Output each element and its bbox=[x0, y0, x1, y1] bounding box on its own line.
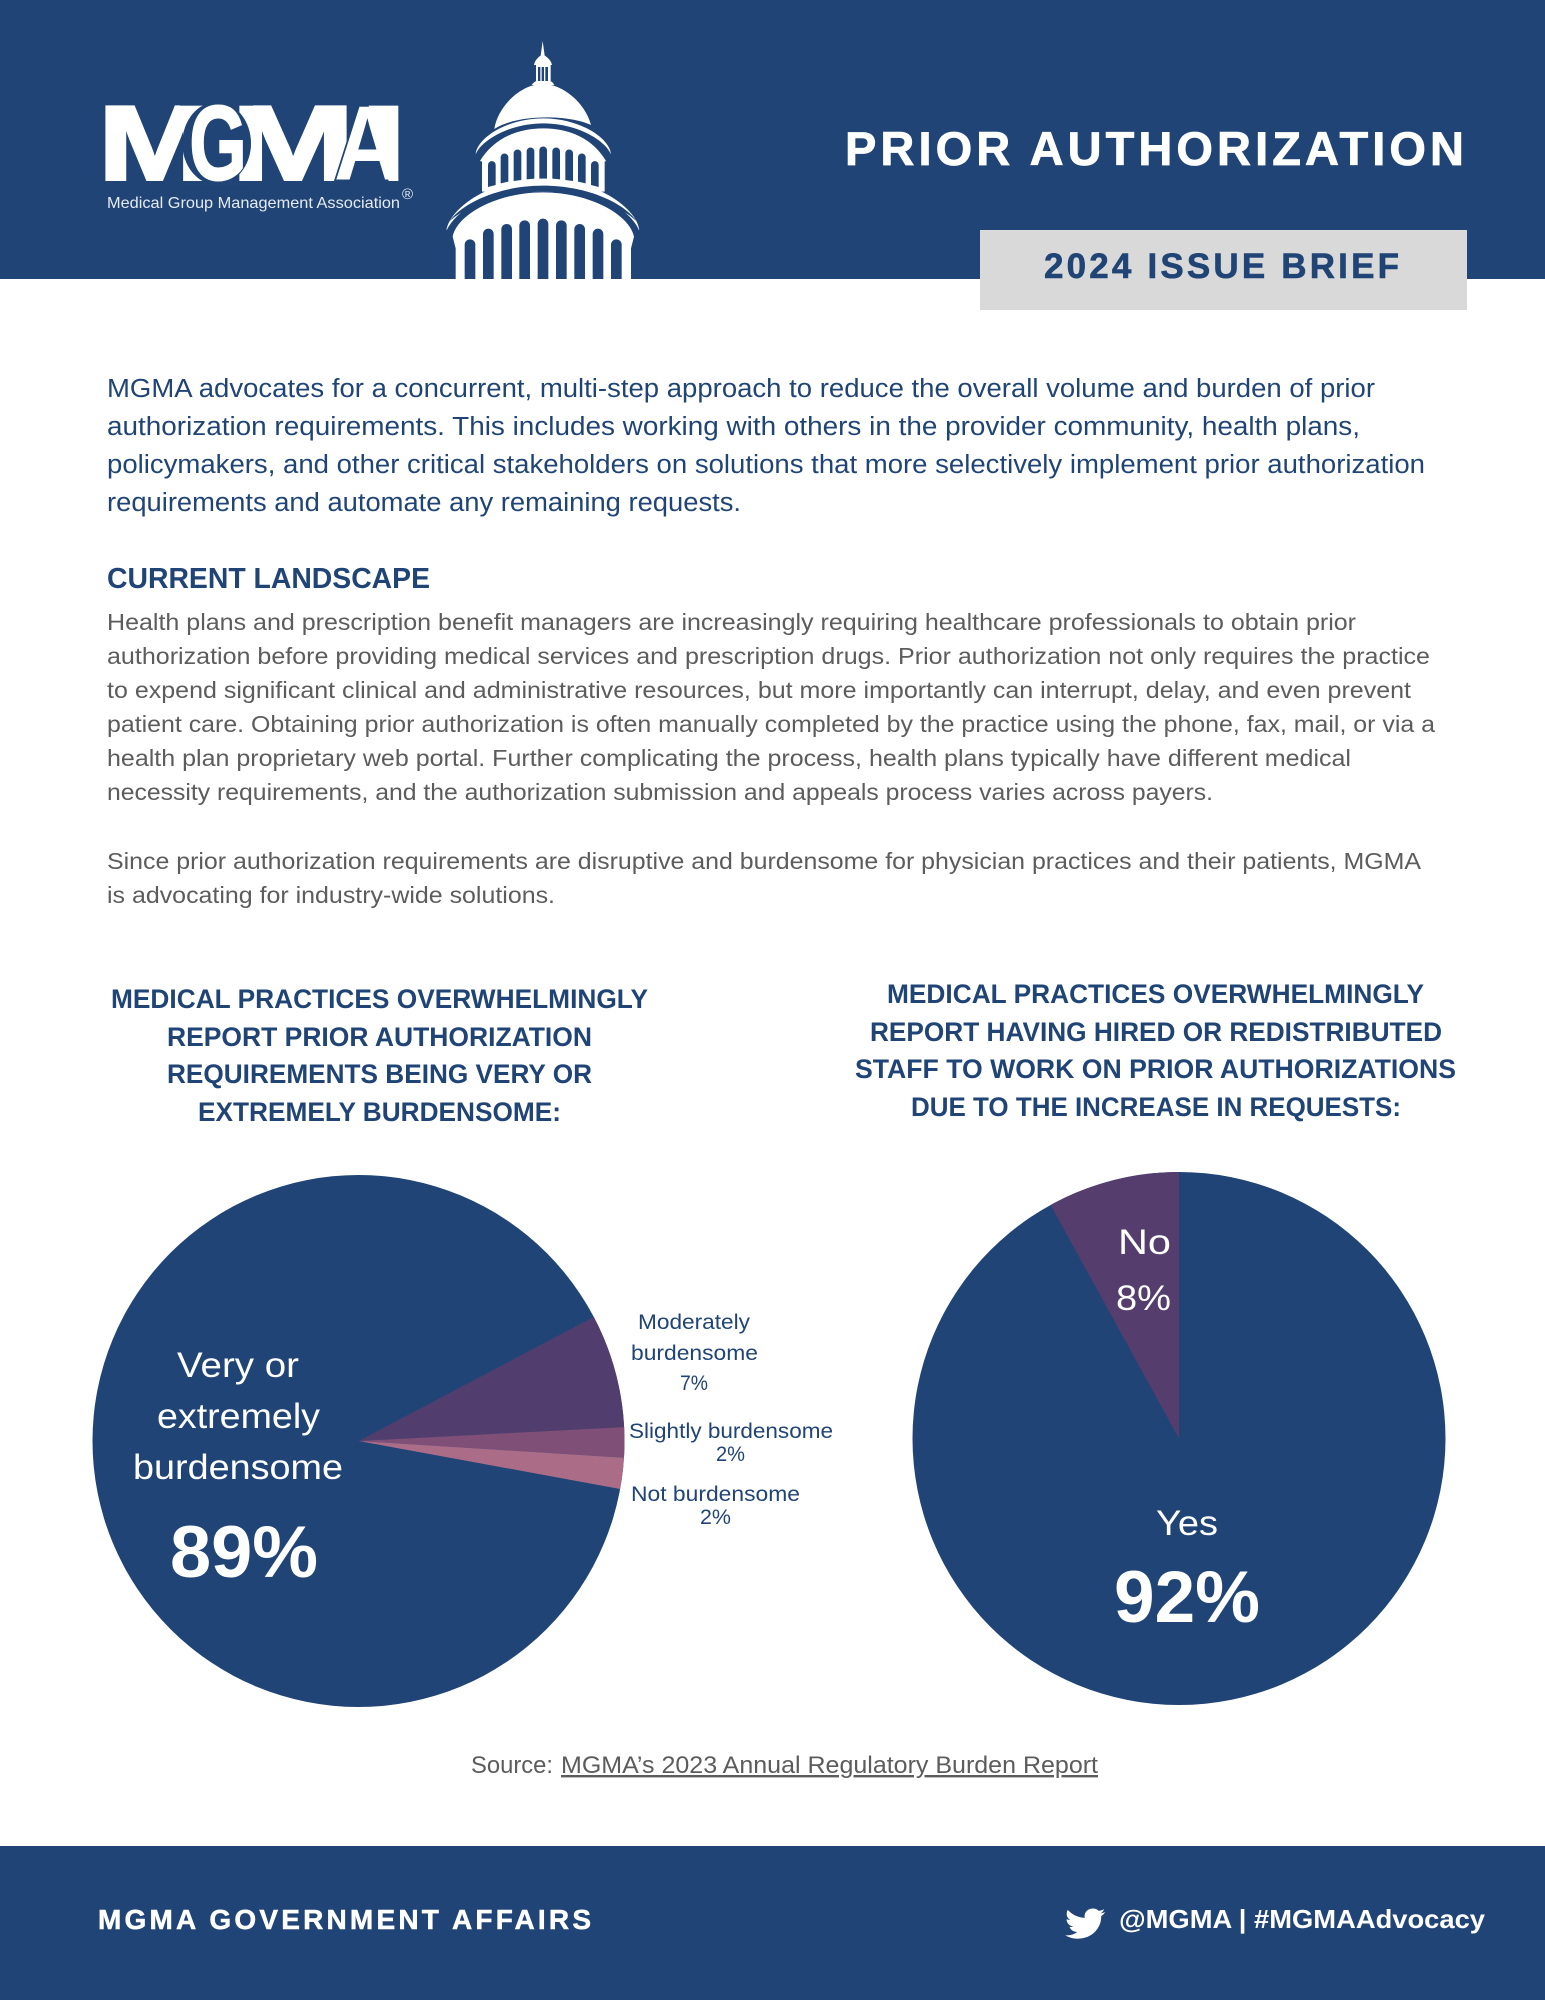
pie chart: hired or redistributed staff bbox=[912, 1172, 1446, 1705]
source line: MGMA’s 2023 Annual Regulatory Burden Report bbox=[561, 1752, 1098, 1779]
panel: header band bbox=[0, 0, 1545, 279]
label: not burdensome bbox=[631, 1482, 800, 1529]
label: slightly burdensome bbox=[629, 1419, 833, 1466]
text block: current landscape body: necessity requirements, and the authorization submission and appeals process varies across payers. bbox=[107, 779, 1213, 805]
pie chart: burden level bbox=[92, 1175, 624, 1707]
icon: capitol dome bbox=[447, 41, 639, 279]
heading: right chart bbox=[855, 979, 1456, 1122]
text block: introduction bbox=[107, 375, 1425, 517]
logo: MGMA bbox=[98, 85, 413, 212]
label: yes: Yes bbox=[1156, 1504, 1218, 1543]
text block: introduction: authorization requirements. This includes working with others in the provider community, health plans, bbox=[107, 413, 1360, 441]
heading: left chart bbox=[111, 984, 648, 1127]
label: not burdensome: 2% bbox=[700, 1505, 731, 1529]
label: no bbox=[1116, 1223, 1171, 1318]
text block: introduction: MGMA advocates for a concurrent, multi-step approach to reduce the overall volume and burden of prior bbox=[107, 375, 1376, 403]
label: slightly burdensome: Slightly burdensome bbox=[629, 1419, 833, 1443]
logo: MGMA: M bbox=[98, 85, 211, 203]
source line: Source: bbox=[471, 1752, 553, 1779]
label: very or extremely burdensome: 89% bbox=[170, 1512, 318, 1593]
label: yes bbox=[1114, 1504, 1260, 1638]
label: no: No bbox=[1118, 1223, 1171, 1262]
label: very or extremely burdensome: Very or bbox=[177, 1346, 299, 1385]
footer title: MGMA GOVERNMENT AFFAIRS bbox=[98, 1904, 591, 1935]
label: very or extremely burdensome: extremely bbox=[157, 1397, 321, 1436]
logo: MGMA: A bbox=[334, 85, 401, 203]
label: moderately burdensome: Moderately bbox=[638, 1310, 750, 1334]
heading: left chart: MEDICAL PRACTICES OVERWHELMINGLY bbox=[111, 984, 648, 1014]
logo: MGMA: ® bbox=[402, 186, 413, 203]
label: moderately burdensome bbox=[631, 1310, 758, 1395]
social handles: @MGMA | #MGMAAdvocacy bbox=[1119, 1904, 1486, 1934]
text block: current landscape body: is advocating for industry-wide solutions. bbox=[107, 882, 555, 908]
icon: twitter bird bbox=[1065, 1908, 1105, 1939]
text block: current landscape body: Since prior authorization requirements are disruptive and burdensome for physician practices and their patients, MGMA bbox=[107, 848, 1421, 874]
text block: current landscape body bbox=[107, 609, 1436, 908]
text block: current landscape body: Health plans and prescription benefit managers are increasingly requiring healthcare professionals to obtain prior bbox=[107, 609, 1356, 635]
text block: current landscape body: to expend significant clinical and administrative resources, but more importantly can interrupt, delay, and even prevent bbox=[107, 677, 1411, 703]
heading: right chart: STAFF TO WORK ON PRIOR AUTHORIZATIONS bbox=[855, 1054, 1456, 1084]
heading: right chart: REPORT HAVING HIRED OR REDISTRIBUTED bbox=[870, 1017, 1442, 1047]
label: not burdensome: Not burdensome bbox=[631, 1482, 800, 1506]
label: no: 8% bbox=[1116, 1279, 1171, 1318]
badge: 2024 issue brief: 2024 ISSUE BRIEF bbox=[1044, 247, 1399, 286]
badge: 2024 issue brief bbox=[980, 230, 1467, 310]
label: very or extremely burdensome: burdensome bbox=[133, 1448, 343, 1487]
heading: left chart: EXTREMELY BURDENSOME: bbox=[198, 1097, 561, 1127]
panel: footer band bbox=[0, 1846, 1545, 2000]
label: slightly burdensome: 2% bbox=[716, 1442, 745, 1466]
text block: current landscape body: authorization before providing medical services and prescription drugs. Prior authorization not only requires the practice bbox=[107, 643, 1430, 669]
heading: current landscape: CURRENT LANDSCAPE bbox=[107, 563, 430, 595]
text block: introduction: requirements and automate any remaining requests. bbox=[107, 489, 741, 517]
title: PRIOR AUTHORIZATION bbox=[845, 122, 1464, 175]
heading: right chart: DUE TO THE INCREASE IN REQUESTS: bbox=[911, 1092, 1401, 1122]
heading: right chart: MEDICAL PRACTICES OVERWHELMINGLY bbox=[887, 979, 1424, 1009]
heading: left chart: REQUIREMENTS BEING VERY OR bbox=[167, 1059, 592, 1089]
label: yes: 92% bbox=[1114, 1557, 1260, 1638]
label: moderately burdensome: burdensome bbox=[631, 1341, 758, 1365]
text block: current landscape body: health plan proprietary web portal. Further complicating the process, health plans typically have different medical bbox=[107, 745, 1351, 771]
label: very or extremely burdensome bbox=[133, 1346, 343, 1593]
logo: MGMA: G bbox=[189, 85, 247, 203]
logo: MGMA: M bbox=[231, 85, 355, 203]
logo: MGMA: Medical Group Management Association bbox=[107, 195, 400, 212]
text block: introduction: policymakers, and other critical stakeholders on solutions that more selectively implement prior authorization bbox=[107, 451, 1425, 479]
text block: current landscape body: patient care. Obtaining prior authorization is often manually completed by the practice using the phone, fax, mail, or via a bbox=[107, 711, 1436, 737]
label: moderately burdensome: 7% bbox=[680, 1371, 708, 1395]
heading: left chart: REPORT PRIOR AUTHORIZATION bbox=[167, 1022, 592, 1052]
